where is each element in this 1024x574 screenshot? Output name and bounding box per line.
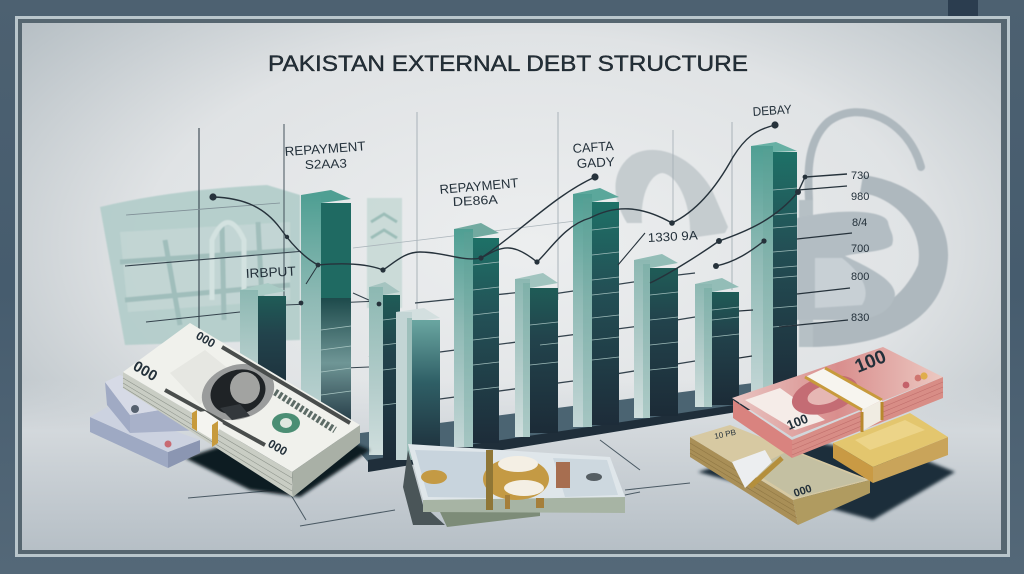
bar 1 <box>240 283 286 410</box>
chart labels: 980 <box>851 191 869 203</box>
chart labels: 830 <box>851 312 869 324</box>
tan banknote stack: 000 <box>792 483 813 500</box>
US dollar stack: 000 <box>266 436 290 459</box>
bar 8 <box>634 254 678 418</box>
chart labels: GADY <box>576 154 615 171</box>
red yuan banknote stack: 100 <box>852 346 889 378</box>
watermark: dollar sign <box>797 112 948 347</box>
US dollar stack: 000 <box>194 328 218 351</box>
tan banknote stack <box>690 425 870 525</box>
chart labels: 800 <box>851 271 869 283</box>
bar chart <box>240 142 797 460</box>
watermark: banknote <box>100 185 402 345</box>
chart labels <box>245 102 869 324</box>
shadow: left money <box>185 420 370 497</box>
bar 3 <box>369 282 400 460</box>
chart labels: 700 <box>851 243 869 255</box>
US dollar stack: 000 <box>130 358 160 385</box>
chart labels: REPAYMENT <box>439 175 519 197</box>
chart grid lines <box>125 112 732 399</box>
chart labels: 8/4 <box>852 217 867 229</box>
bar 9 <box>695 278 739 407</box>
red yuan banknote stack: 100 <box>785 411 810 433</box>
bar 10 <box>751 142 797 396</box>
data points <box>209 121 807 306</box>
small blue banknote stacks <box>90 375 205 468</box>
shadow: right money <box>698 440 955 520</box>
floor lines <box>188 440 690 526</box>
US dollar stack <box>123 323 360 497</box>
tan banknote stack: 10 PB <box>714 428 737 441</box>
central banknote stack <box>403 444 625 527</box>
title: PAKISTAN EXTERNAL DEBT STRUCTURE <box>268 51 748 76</box>
red yuan banknote stack <box>732 346 943 458</box>
chart labels: S2AA3 <box>305 157 347 172</box>
trend lines <box>213 125 852 358</box>
chart labels: DEBAY <box>752 102 793 119</box>
platform under bars <box>345 377 835 472</box>
bar 4 <box>396 308 440 460</box>
bar 7 <box>573 188 619 427</box>
yellow banknote stack <box>833 413 948 483</box>
chart labels: IRBPUT <box>245 263 296 281</box>
bar 2 <box>301 190 351 430</box>
chart labels: 730 <box>851 170 869 182</box>
bar 5 <box>454 223 499 447</box>
chart labels: REPAYMENT <box>284 138 366 159</box>
bar 6 <box>515 273 558 437</box>
chart labels: DE86A <box>452 193 499 209</box>
chart labels: CAFTA <box>572 138 614 156</box>
watermark: zero arch <box>616 150 728 238</box>
chart labels: 1330 9A <box>647 228 699 245</box>
